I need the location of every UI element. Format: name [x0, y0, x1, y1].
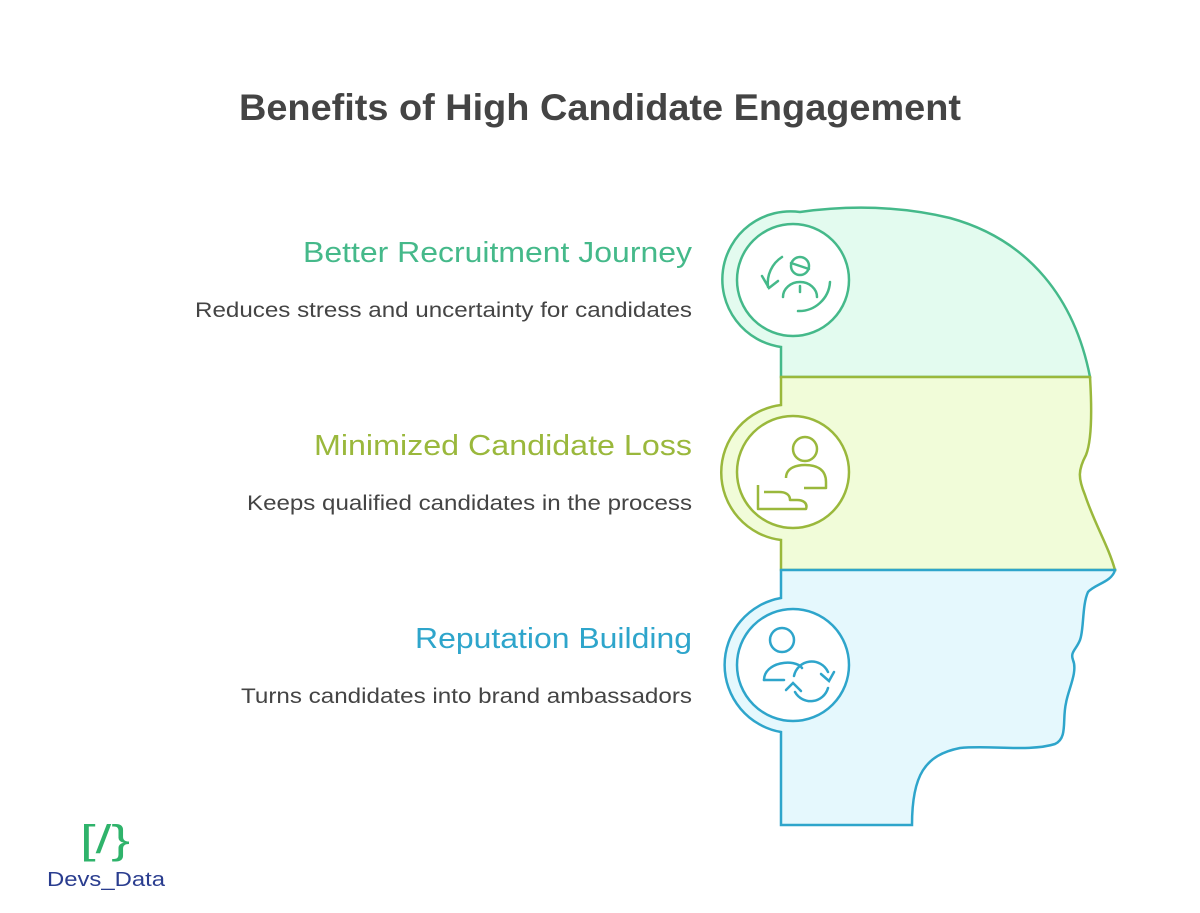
logo — [47, 818, 166, 891]
head band 1 — [722, 208, 1090, 377]
panel: better recruitment journey text — [195, 237, 693, 322]
panel: minimized candidate loss text: Minimized Candidate Loss — [314, 430, 692, 462]
logo: Devs_Data — [47, 869, 166, 891]
panel: reputation building text: Turns candidates into brand ambassadors — [241, 685, 692, 708]
icon: candidate with hand — [737, 416, 849, 528]
icon: recruitment journey — [737, 224, 849, 336]
panel: better recruitment journey text: Reduces stress and uncertainty for candidates — [195, 299, 692, 322]
panel: reputation building text — [241, 623, 692, 708]
panel: minimized candidate loss text — [247, 430, 692, 515]
head band 3 — [725, 570, 1115, 825]
head band 2 — [721, 377, 1115, 570]
panel: better recruitment journey text: Better Recruitment Journey — [303, 237, 693, 269]
logo: [/} — [80, 818, 130, 862]
title: Benefits of High Candidate Engagement — [239, 87, 961, 128]
panel: minimized candidate loss text: Keeps qualified candidates in the process — [247, 492, 692, 515]
icon: reputation cycle — [737, 609, 849, 721]
panel: reputation building text: Reputation Building — [415, 623, 692, 655]
